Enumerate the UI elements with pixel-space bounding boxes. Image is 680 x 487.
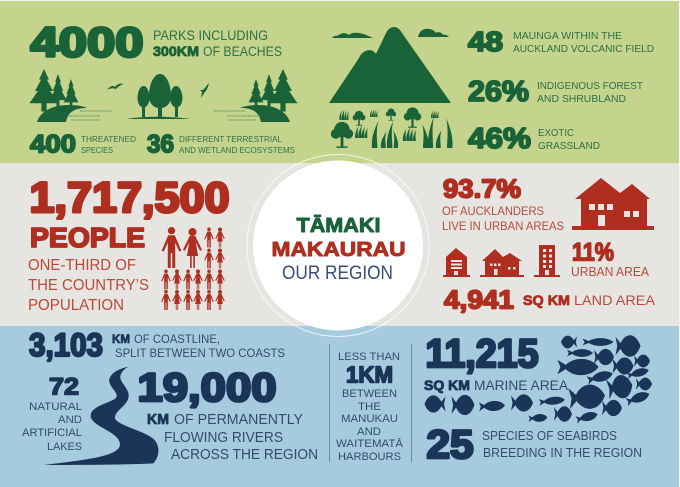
stat: 36 ecosystems — [147, 130, 295, 158]
stat: population: POPULATION — [28, 297, 124, 314]
stat: 93.7% urban: 93.7% — [443, 174, 521, 204]
stat: 4000 parks: 4000 — [30, 18, 144, 66]
stat: 72 lakes: NATURAL — [29, 401, 82, 413]
stat: 11% urban area: 11% — [572, 238, 614, 266]
panel: parks and nature (green band) — [0, 1, 679, 163]
panel: water and coast (blue band) — [0, 326, 679, 487]
icon: winding river — [43, 367, 158, 465]
stat: population — [28, 174, 230, 314]
stat: 3,103 km coastline — [29, 327, 285, 363]
stat: less than 1km between harbours: HARBOURS — [338, 451, 401, 463]
stat: 36 ecosystems: AND WETLAND ECOSYSTEMS — [179, 145, 295, 155]
stat: 26% forest — [468, 76, 644, 108]
stat: 3,103 km coastline: KM — [112, 332, 130, 346]
stat: 4000 parks — [30, 18, 282, 66]
stat: 4,941 sq km: SQ KM — [523, 293, 570, 308]
central circle title: MAKAURAU — [272, 239, 406, 261]
stat: 26% forest: 26% — [468, 76, 529, 108]
stat: 46% grassland: 46% — [468, 123, 531, 155]
stat: 4000 parks: OF BEACHES — [203, 44, 282, 59]
icon: mountain with clouds — [329, 27, 451, 103]
stat: 36 ecosystems: 36 — [147, 130, 174, 158]
stat: 25 seabird species: BREEDING IN THE REGION — [483, 446, 642, 460]
stat: 19,000 km rivers: FLOWING RIVERS — [164, 429, 283, 446]
icon: large houses — [572, 178, 654, 230]
stat: 4000 parks: PARKS INCLUDING — [153, 28, 268, 43]
stat: 48 maunga: AUCKLAND VOLCANIC FIELD — [513, 43, 654, 55]
stat: 4,941 sq km — [444, 284, 655, 314]
stat: 19,000 km rivers: OF PERMANENTLY — [174, 411, 303, 428]
stat: less than 1km between harbours: LESS THAN — [338, 351, 400, 363]
stat: population: 1,717,500 — [30, 174, 230, 222]
stat: 93.7% urban: LIVE IN URBAN AREAS — [442, 219, 564, 233]
stat: 400 threatened species: THREATENED — [81, 134, 136, 144]
stat: 11,215 sq km marine area: SQ KM — [424, 378, 470, 393]
icon: garage — [443, 248, 470, 277]
stat: 4,941 sq km: LAND AREA — [574, 293, 655, 308]
stat: 19,000 km rivers: 19,000 — [138, 366, 276, 410]
stat: 25 seabird species — [426, 423, 642, 467]
stat: 72 lakes: ARTIFICIAL — [22, 427, 82, 439]
panel: people and urban (grey band) — [0, 163, 679, 326]
stat: 400 threatened species: SPECIES — [81, 145, 113, 155]
stat: 72 lakes — [22, 374, 82, 453]
stat: 3,103 km coastline: 3,103 — [29, 327, 103, 363]
stat: 400 threatened species: 400 — [30, 130, 76, 158]
icon: school of fish — [424, 335, 652, 424]
stat: 93.7% urban: OF AUCKLANDERS — [442, 204, 544, 218]
stat: 25 seabird species: SPECIES OF SEABIRDS — [482, 429, 617, 443]
stat: population: THE COUNTRY’S — [28, 277, 149, 294]
stat: less than 1km between harbours: BETWEEN — [342, 388, 397, 400]
stat: 48 maunga: MAUNGA WITHIN THE — [513, 30, 622, 42]
stat: 72 lakes: AND — [58, 414, 82, 426]
icon: shrubs and grasses — [331, 107, 453, 148]
icon: left island with trees — [29, 69, 112, 122]
stat: less than 1km between harbours: 1KM — [346, 362, 393, 388]
stat: less than 1km between harbours: AND — [357, 426, 381, 438]
stat: 48 maunga: 48 — [468, 26, 503, 57]
icon: right island with trees — [213, 69, 298, 122]
stat: 11,215 sq km marine area: MARINE AREA — [474, 378, 568, 393]
stat: less than 1km between harbours: THE — [358, 401, 381, 413]
stat: 4,941 sq km: 4,941 — [444, 284, 514, 314]
stat: 46% grassland: GRASSLAND — [538, 140, 600, 152]
stat: 4000 parks: 300KM — [153, 44, 199, 59]
stat: 36 ecosystems: DIFFERENT TERRESTRIAL — [179, 134, 282, 144]
stat: less than 1km between harbours: MANUKAU — [341, 413, 398, 425]
icon: small houses — [480, 249, 524, 277]
stat: 25 seabird species: 25 — [426, 423, 474, 467]
stat: 48 maunga — [468, 26, 654, 57]
stat: 46% grassland: EXOTIC — [538, 127, 574, 139]
central circle title: OUR REGION — [282, 263, 393, 284]
central circle title: TĀMAKI — [296, 215, 380, 237]
stat: population: PEOPLE — [30, 222, 145, 253]
icon: bird left — [107, 84, 124, 90]
stat: 11,215 sq km marine area — [424, 332, 568, 393]
stat: 11% urban area: URBAN AREA — [571, 264, 649, 279]
icon: apartment tower — [534, 245, 560, 277]
stat: 19,000 km rivers: KM — [147, 411, 169, 428]
stat: 46% grassland — [468, 123, 600, 155]
stat: 72 lakes: LAKES — [47, 441, 82, 453]
central circle title — [247, 154, 429, 336]
stat: 11% urban area — [571, 238, 649, 279]
icon: bird right — [200, 83, 209, 98]
stat: 93.7% urban — [442, 174, 564, 233]
stat: 26% forest: AND SHRUBLAND — [537, 93, 626, 105]
stat: 19,000 km rivers — [138, 366, 318, 463]
stat: 72 lakes: 72 — [49, 374, 79, 400]
stat: 400 threatened species — [30, 130, 136, 158]
icon: central trees — [126, 74, 190, 119]
stat: 26% forest: INDIGENOUS FOREST — [537, 80, 644, 92]
stat: less than 1km between harbours — [330, 344, 412, 463]
stat: 19,000 km rivers: ACROSS THE REGION — [171, 446, 318, 463]
stat: less than 1km between harbours: WAITEMATĀ — [336, 438, 404, 450]
stat: 3,103 km coastline: OF COASTLINE, — [134, 332, 220, 346]
stat: 3,103 km coastline: SPLIT BETWEEN TWO COASTS — [115, 346, 285, 360]
stat: population: ONE-THIRD OF — [28, 257, 136, 274]
icon: people pictogram — [161, 227, 225, 310]
stat: 11,215 sq km marine area: 11,215 — [426, 332, 538, 376]
